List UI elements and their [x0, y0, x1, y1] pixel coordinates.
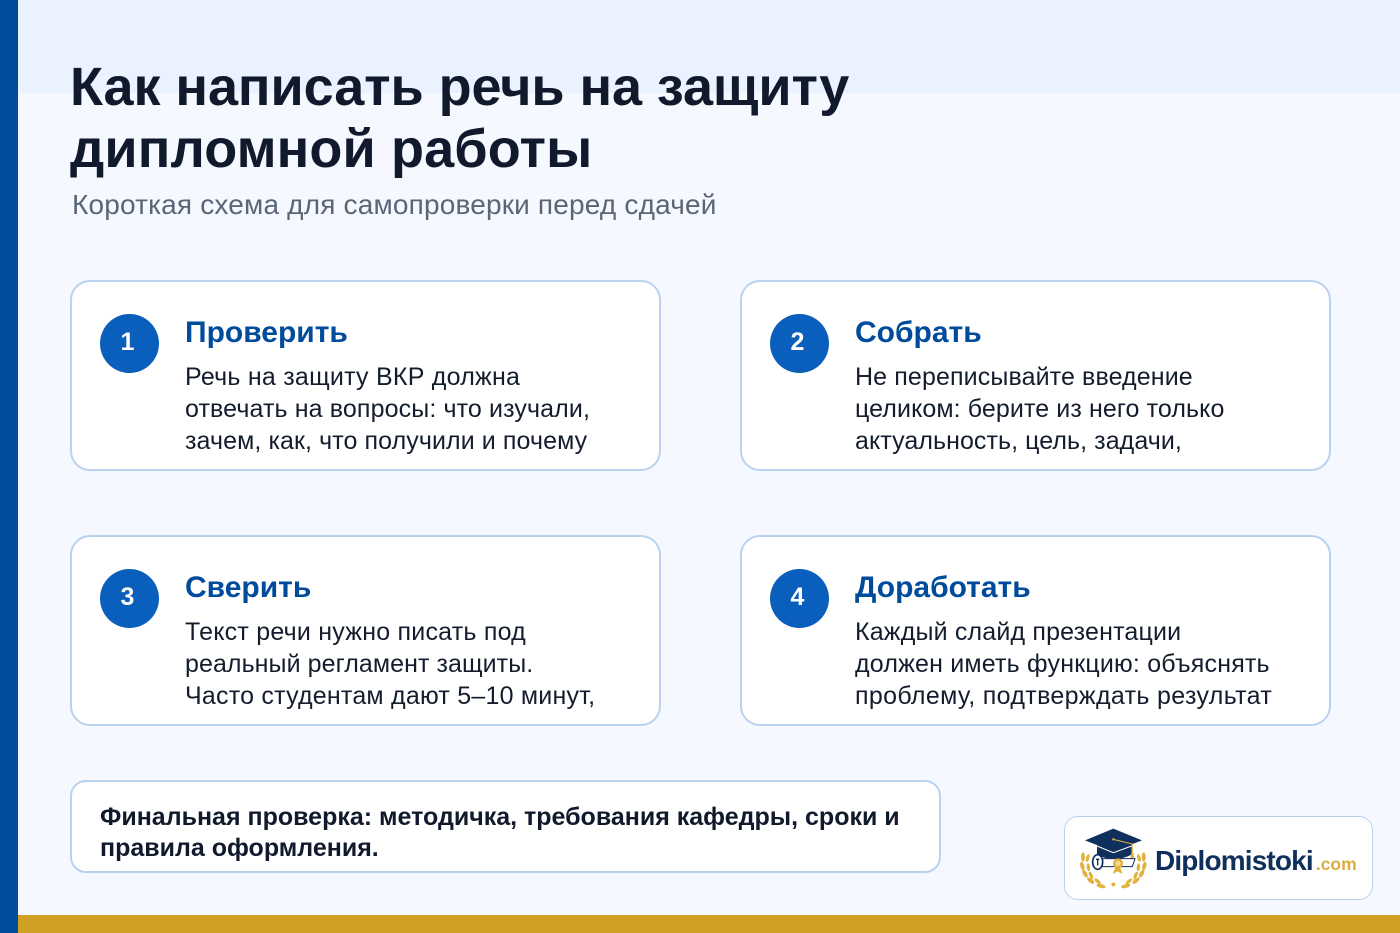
title: дипломной работы	[70, 119, 592, 179]
step 2 text	[855, 363, 1224, 455]
logo panel	[1064, 816, 1373, 900]
panel: step 1	[70, 280, 661, 471]
step 2 text: Не переписывайте введение	[855, 363, 1193, 391]
step 3 number: 3	[121, 583, 134, 611]
icon: graduation cap with laurel	[1080, 828, 1147, 888]
step 4 heading: Доработать	[855, 571, 1031, 604]
step 2 number: 2	[791, 328, 804, 356]
step 2 number	[770, 314, 829, 373]
panel: step 3	[70, 535, 661, 726]
step 4 text: проблему, подтверждать результат	[855, 682, 1272, 710]
callout: final check: правила оформления.	[100, 834, 379, 862]
top header band	[18, 0, 1400, 93]
step 3 number	[100, 569, 159, 628]
step 4 text: должен иметь функцию: объяснять	[855, 650, 1270, 678]
step 1 number	[100, 314, 159, 373]
step 1 text: отвечать на вопросы: что изучали,	[185, 395, 590, 423]
step 4 text: Каждый слайд презентации	[855, 618, 1181, 646]
step 1 text: зачем, как, что получили и почему	[185, 427, 587, 455]
step 2 text: целиком: берите из него только	[855, 395, 1224, 423]
step 3 text	[185, 618, 595, 710]
left accent bar	[0, 0, 18, 933]
step 3 text: Текст речи нужно писать под	[185, 618, 526, 646]
step 3 text: реальный регламент защиты.	[185, 650, 533, 678]
panel: step 2	[740, 280, 1331, 471]
callout: final check	[70, 780, 941, 873]
step 3 heading: Сверить	[185, 571, 311, 604]
step 2 heading: Собрать	[855, 316, 982, 349]
subtitle: Короткая схема для самопроверки перед сдачей	[72, 189, 717, 220]
step 1 text	[185, 363, 590, 455]
bottom gold bar	[18, 915, 1400, 933]
step 3 text: Часто студентам дают 5–10 минут,	[185, 682, 595, 710]
callout: final check: Финальная проверка: методичка, требования кафедры, сроки и	[100, 803, 900, 831]
title	[70, 57, 849, 179]
step 1 heading: Проверить	[185, 316, 348, 349]
panel: step 4	[740, 535, 1331, 726]
title: Как написать речь на защиту	[70, 57, 849, 117]
step 4 text	[855, 618, 1272, 710]
step 1 number: 1	[121, 328, 134, 356]
step 4 number: 4	[791, 583, 804, 611]
step 2 text: актуальность, цель, задачи,	[855, 427, 1182, 455]
step 4 number	[770, 569, 829, 628]
step 1 text: Речь на защиту ВКР должна	[185, 363, 520, 391]
logo wordmark: Diplomistoki.com	[1155, 845, 1357, 876]
